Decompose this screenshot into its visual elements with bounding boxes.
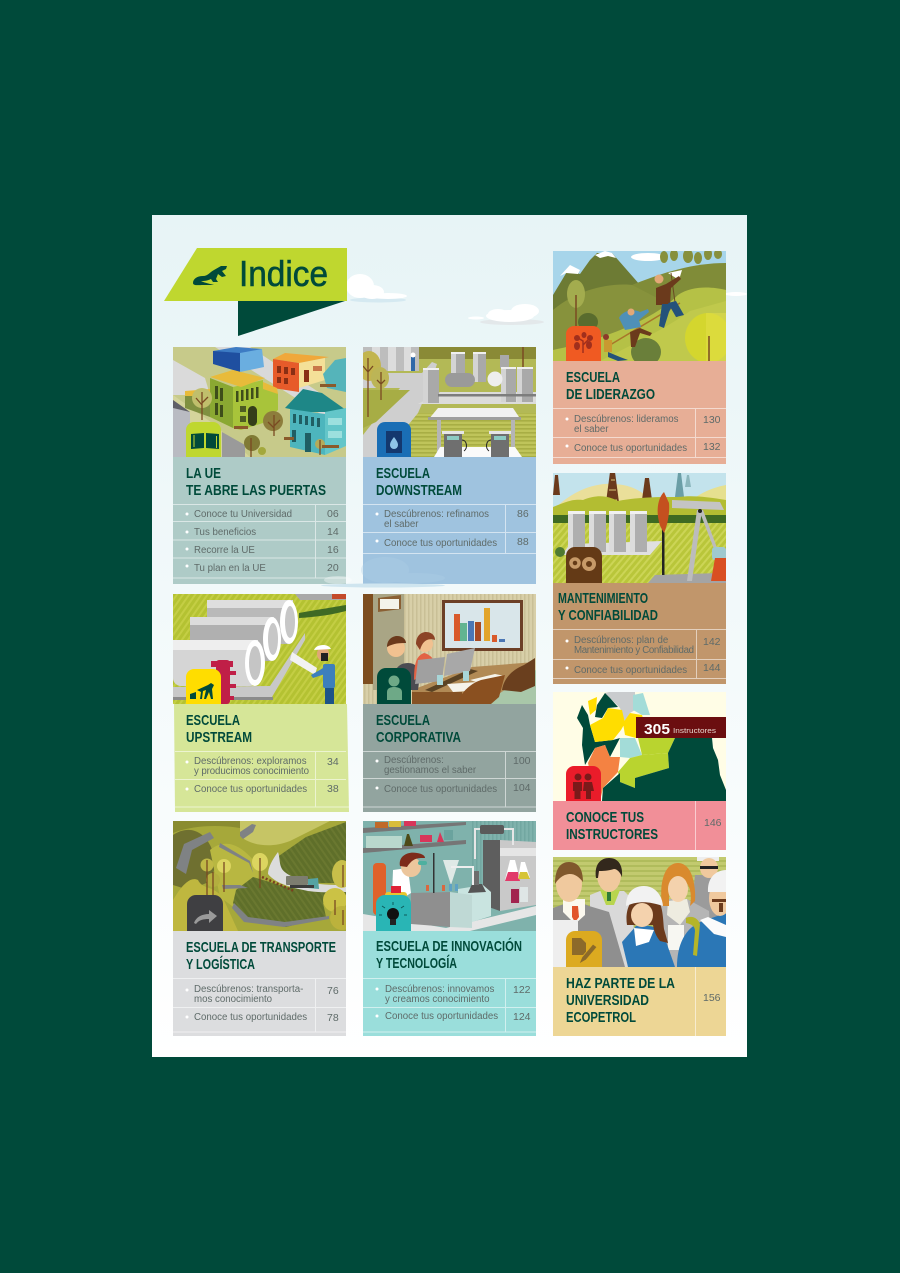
card body xyxy=(173,457,346,584)
contents list: 124 xyxy=(513,1011,531,1023)
heading: Y TECNOLOGÍA xyxy=(376,955,457,972)
contents list: 132 xyxy=(703,441,721,453)
heading: ESCUELA xyxy=(376,465,430,482)
heading: CORPORATIVA xyxy=(376,729,461,746)
contents list xyxy=(175,752,349,807)
icon tab: light bulb xyxy=(376,895,411,931)
contents list: Conoce tus oportunidades xyxy=(384,538,497,549)
contents list: gestionamos el saber xyxy=(384,765,477,776)
heading: LA UE xyxy=(186,465,221,482)
panel: La UE te abre las puertas xyxy=(173,347,352,584)
cloud over card xyxy=(361,557,445,583)
heading: INSTRUCTORES xyxy=(566,826,658,843)
contents list: 144 xyxy=(703,662,721,674)
white index sheet xyxy=(152,215,747,1057)
card body xyxy=(174,704,349,812)
contents list: 14 xyxy=(327,526,339,538)
contents list: 130 xyxy=(703,414,721,426)
illustration: road and tanker truck xyxy=(173,821,354,931)
contents list xyxy=(173,504,346,578)
card body xyxy=(553,583,726,684)
illustration: refinery and fuel station xyxy=(357,347,536,457)
heading: DE LIDERAZGO xyxy=(566,386,655,403)
contents list: Descúbrenos: lideramos xyxy=(574,414,679,425)
icon tab: oil pump xyxy=(186,669,221,704)
contents list: el saber xyxy=(384,519,419,530)
heading: UPSTREAM xyxy=(186,729,252,746)
contents list xyxy=(553,408,726,458)
heading: ESCUELA xyxy=(566,369,620,386)
contents list: Descúbrenos: transporta- xyxy=(194,984,303,995)
banner fold xyxy=(238,301,345,336)
card body xyxy=(553,801,726,850)
heading: Y LOGÍSTICA xyxy=(186,956,255,973)
panel: Escuela Corporativa xyxy=(363,594,536,812)
page number xyxy=(696,967,721,1036)
contents list: y creamos conocimiento xyxy=(385,994,489,1005)
card body xyxy=(363,457,536,584)
contents list: Recorre la UE xyxy=(194,545,255,556)
heading: UNIVERSIDAD xyxy=(566,992,649,1009)
contents list: 06 xyxy=(327,508,339,520)
contents list: 34 xyxy=(327,756,339,768)
contents list: 78 xyxy=(327,1012,339,1024)
heading: Y CONFIABILIDAD xyxy=(558,607,658,624)
clouds behind the title xyxy=(346,274,747,325)
panel: Mantenimiento y Confiabilidad xyxy=(553,472,726,684)
icon tab: executive xyxy=(377,668,411,704)
contents list: mos conocimiento xyxy=(194,994,272,1005)
illustration: climbers on a hill xyxy=(553,248,731,366)
card body xyxy=(363,704,536,812)
card body xyxy=(553,361,726,464)
contents list: 142 xyxy=(703,636,721,648)
card body xyxy=(173,931,346,1036)
contents list: Descúbrenos: plan de xyxy=(574,635,668,646)
illustration: regional map: 305 xyxy=(644,721,670,738)
heading: HAZ PARTE DE LA xyxy=(566,975,675,992)
title text: Indice xyxy=(239,253,328,294)
icon tab: people xyxy=(566,766,601,801)
panel: Escuela Upstream xyxy=(173,594,349,812)
contents list: Tu plan en la UE xyxy=(194,563,266,574)
contents list: Tus beneficios xyxy=(194,527,256,538)
contents list: Descúbrenos: exploramos xyxy=(194,756,307,767)
card body xyxy=(363,931,536,1036)
icon tab: tree xyxy=(566,326,601,361)
card body xyxy=(553,967,726,1036)
heading: TE ABRE LAS PUERTAS xyxy=(186,482,326,499)
contents list xyxy=(553,630,726,678)
contents list: 88 xyxy=(517,536,529,548)
contents list: 76 xyxy=(327,985,339,997)
contents list xyxy=(363,504,536,554)
illustration: meeting room xyxy=(363,594,536,704)
panel: Escuela de Transporte y Logística xyxy=(173,821,354,1036)
icon: iguana xyxy=(193,266,227,285)
contents list: Conoce tus oportunidades xyxy=(574,443,687,454)
contents list: Conoce tus oportunidades xyxy=(194,784,307,795)
contents list xyxy=(363,752,536,807)
heading: ESCUELA xyxy=(376,712,430,729)
heading: ESCUELA DE TRANSPORTE xyxy=(186,939,336,956)
contents list: 104 xyxy=(513,782,531,794)
contents list: 86 xyxy=(517,508,529,520)
illustration: town xyxy=(173,347,346,457)
contents list: Conoce tus oportunidades xyxy=(384,784,497,795)
page number xyxy=(696,801,722,850)
contents list: Descúbrenos: xyxy=(384,755,444,766)
illustration: silos and oil pump xyxy=(553,472,726,583)
contents list: 38 xyxy=(327,783,339,795)
contents list: Conoce tu Universidad xyxy=(194,509,292,520)
contents list xyxy=(363,978,536,1032)
heading: ESCUELA DE INNOVACIÓN xyxy=(376,937,522,955)
illustration: laboratory xyxy=(363,821,536,931)
heading: ECOPETROL xyxy=(566,1009,636,1026)
cloud over card xyxy=(324,576,352,584)
banner face xyxy=(164,248,347,301)
page number: 156 xyxy=(703,992,721,1004)
illustration: regional map: Instructores xyxy=(673,726,716,735)
icon tab: gears xyxy=(566,547,602,583)
contents list: Conoce tus oportunidades xyxy=(574,665,687,676)
contents list: Descúbrenos: innovamos xyxy=(385,984,494,995)
heading: CONOCE TUS xyxy=(566,809,644,826)
panel: Escuela de Liderazgo xyxy=(553,248,731,464)
illustration: regional map xyxy=(553,691,726,801)
icon tab: open book xyxy=(186,422,221,457)
contents list: Conoce tus oportunidades xyxy=(385,1011,498,1022)
icon tab: turn arrow xyxy=(187,895,223,931)
heading: ESCUELA xyxy=(186,712,240,729)
illustration: group of employees xyxy=(553,857,731,967)
contents list: 122 xyxy=(513,984,531,996)
contents list: 20 xyxy=(327,562,339,574)
contents list: y producimos conocimiento xyxy=(194,766,309,777)
heading: MANTENIMIENTO xyxy=(558,590,648,607)
title banner xyxy=(164,248,347,336)
icon tab: pencil and paper xyxy=(566,931,602,967)
contents list: el saber xyxy=(574,424,609,435)
panel: Escuela de Innovación y Tecnología xyxy=(363,821,536,1036)
page number: 146 xyxy=(704,817,722,829)
contents list: 100 xyxy=(513,755,531,767)
heading: DOWNSTREAM xyxy=(376,482,462,499)
contents list: Descúbrenos: refinamos xyxy=(384,509,489,520)
panel: Conoce tus instructores xyxy=(553,691,726,850)
contents list: 16 xyxy=(327,544,339,556)
contents list: Conoce tus oportunidades xyxy=(194,1012,307,1023)
contents list xyxy=(173,978,346,1032)
panel: Escuela Downstream xyxy=(357,347,536,584)
panel: Haz parte de la Universidad Ecopetrol xyxy=(553,857,731,1036)
illustration: pipes and engineer xyxy=(173,594,346,704)
icon tab: oil barrel xyxy=(377,422,411,457)
cloud under first row xyxy=(321,584,445,588)
contents list: Mantenimiento y Confiabilidad xyxy=(574,645,694,656)
